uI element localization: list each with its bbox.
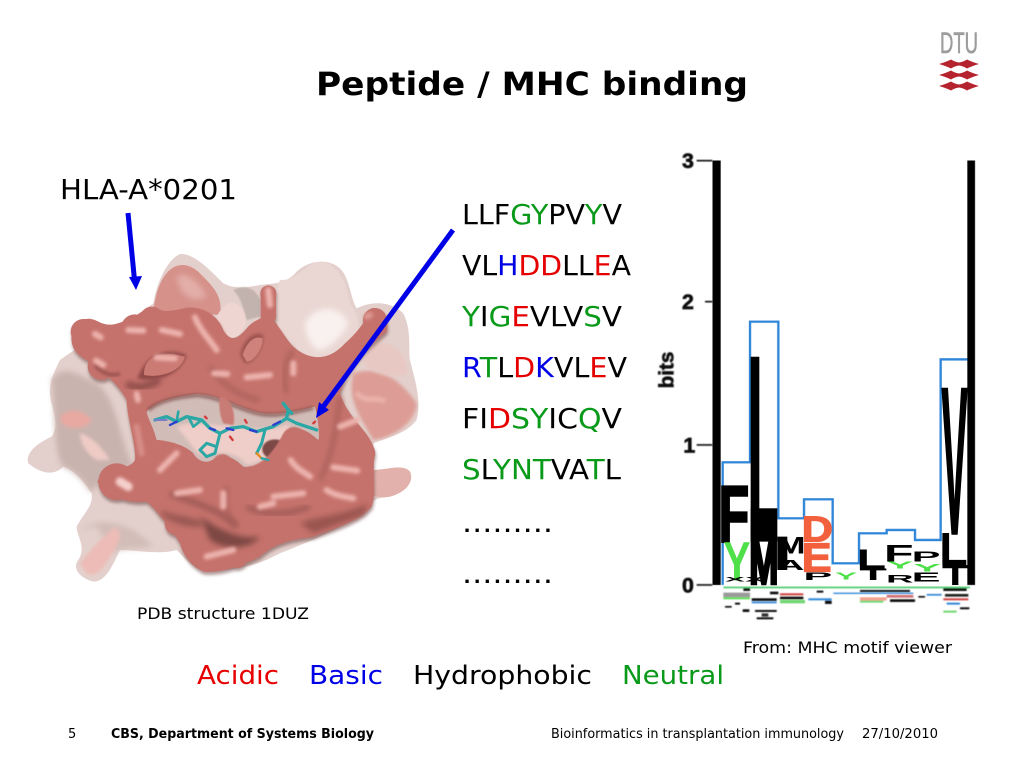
peptide binding groove [147,394,319,467]
source note: From: MHC motif viewer [743,638,952,657]
surface lobe: groove lower bump [213,454,233,470]
course name: Bioinformatics in transplantation immunology [551,727,844,742]
logo letters: R [886,573,914,585]
peptide sequence list [461,198,631,590]
logo letters: P [803,570,832,582]
page number: 5 [68,727,76,742]
logo letters: T [942,559,969,591]
groove ridge [219,397,234,425]
legend: residue classes [197,661,724,691]
logo letters: XX [725,575,766,583]
logo letters: P [912,548,941,565]
black end bars [712,161,975,585]
surface shading [95,334,368,547]
y axis: 0 [682,573,694,597]
sequence 1: LLFGYPVYV [462,198,622,231]
label: HLA-A*0201: HLA-A*0201 [60,173,237,206]
information content outline [723,322,967,585]
department: CBS, Department of Systems Biology [111,727,375,742]
surface cast shadow [71,288,388,575]
logo letters: A [777,557,805,574]
arrow: to HLA molecule [128,213,142,290]
logo letters: E [912,570,941,584]
sequence 5: FIDSYICQV [462,402,622,435]
logo letters: F [719,471,749,560]
date: 27/10/2010 [862,727,938,742]
legend: neutral: Neutral [622,661,724,691]
title: Peptide / MHC binding [316,65,748,103]
footer [68,727,938,742]
logo letters: D [802,510,833,550]
logo letters: T [859,565,887,584]
chart: sequence logo [655,149,975,619]
y axis: bits [655,352,678,388]
logo letters: Y [913,562,941,574]
logo letters: L [939,523,968,575]
salmon front surface [71,285,387,572]
y axis: 3 [682,149,694,173]
ellipsis row 2: ......... [462,557,553,590]
peptide stick model [155,403,317,460]
surface lobe: groove front wall [247,427,317,487]
icon: DTU logo [939,27,979,90]
logo letters: Y [723,532,750,593]
logo letters: Y [887,560,913,571]
logo letters: V [942,345,967,577]
logo letters: M [749,531,778,597]
figure: protein surface structure [28,254,418,582]
icon: DTU logo: DTU [940,27,978,60]
ellipsis row 1: ......... [462,506,553,539]
groove floor [177,423,290,465]
sequence 2: VLHDDLLEA [462,249,631,282]
logo letters: L [857,544,886,575]
surface highlights [95,290,383,557]
legend: acidic: Acidic [197,661,279,691]
legend: hydrophobic: Hydrophobic [413,661,592,691]
caption: PDB structure: PDB structure 1DUZ [137,604,309,623]
legend: basic: Basic [309,661,383,691]
logo letters [719,345,969,597]
logo letters: Y [835,571,857,582]
groove upper wall shadow [148,395,313,415]
sequence 3: YIGEVLVSV [461,300,622,333]
arrow: to peptide [316,230,453,418]
logo letters: E [802,535,832,581]
negative letter stack [723,587,970,619]
sequence 4: RTLDKVLEV [462,351,627,384]
y axis [655,149,712,597]
sequence 6: SLYNTVATL [462,453,621,486]
translucent back surface [28,254,418,582]
logo letters: F [884,540,914,567]
y axis: 2 [682,290,694,314]
groove pit [262,439,288,459]
y axis: 1 [683,433,695,457]
logo letters: M [777,532,806,559]
